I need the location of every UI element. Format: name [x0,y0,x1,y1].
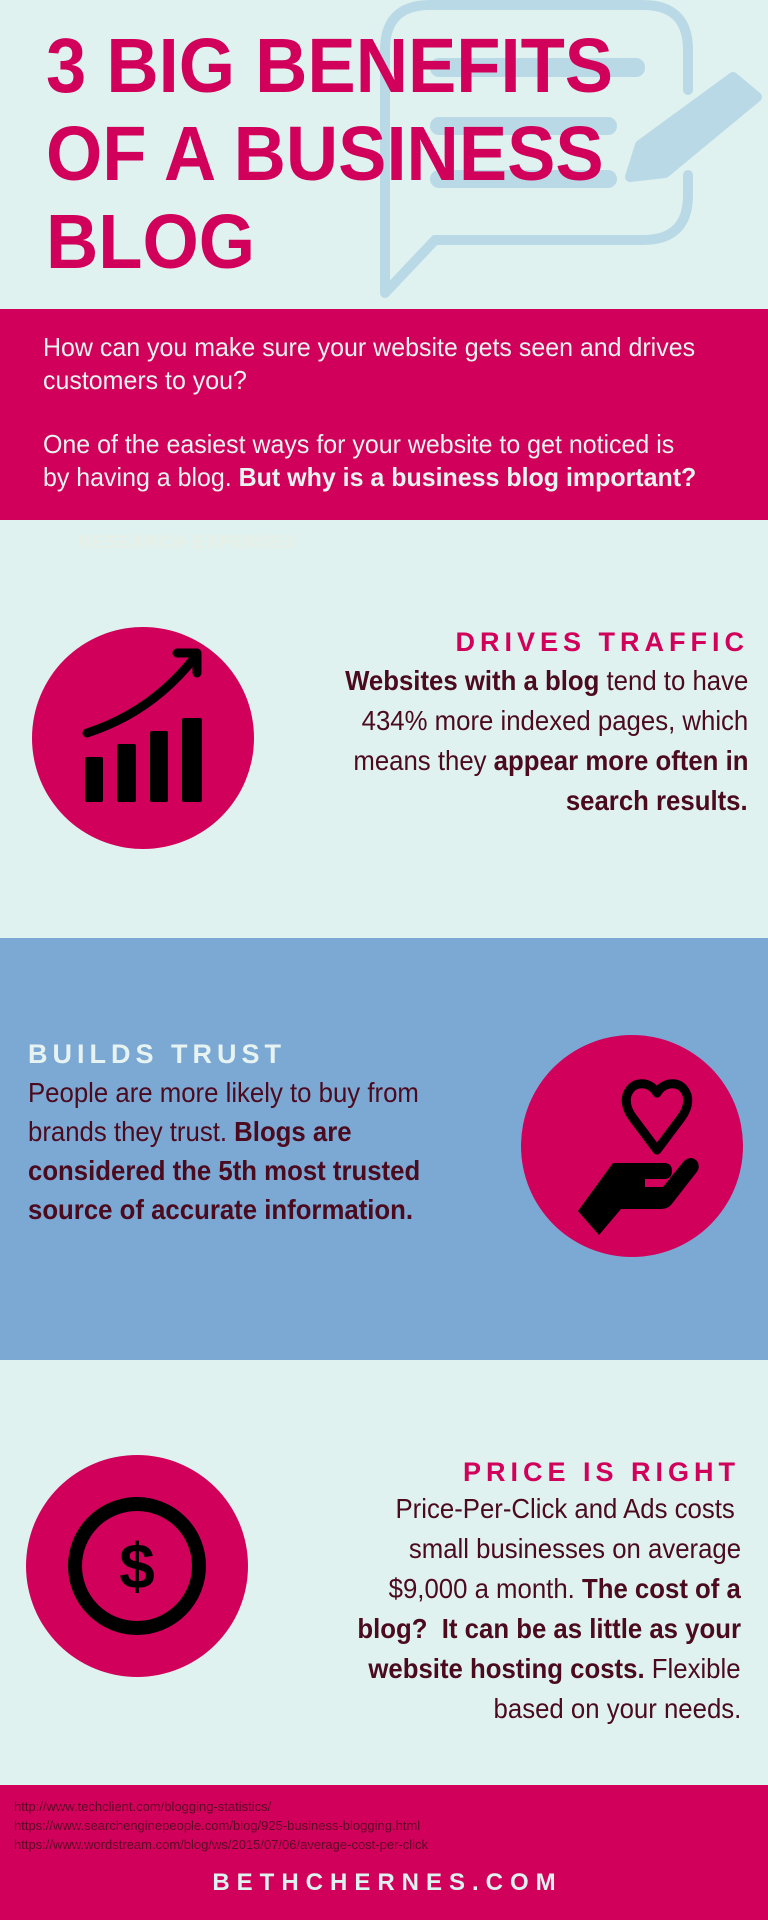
intro text: How can you make sure your website gets seen and drives [43,332,695,362]
icon: heart in hand circle [521,1035,743,1257]
body text: builds trust [28,1077,420,1225]
title [46,23,613,285]
panel: footer [0,1785,768,1920]
title: 3 BIG BENEFITS [46,23,613,109]
body text: drives traffic: Websites with a blog tend to have [345,665,748,696]
body text: price is right: $9,000 a month. The cost of a [389,1573,741,1604]
heading: price is right: PRICE IS RIGHT [463,1457,740,1487]
faint label: RESEARCH EXPENSES [78,532,298,552]
body text: price is right: blog? It can be as little as your [357,1613,741,1644]
body text: price is right [357,1493,741,1724]
icon: dollar coin circle [26,1455,248,1677]
panel: intro [0,309,768,520]
intro text [43,332,696,492]
sources: https://www.wordstream.com/blog/ws/2015/07/06/average-cost-per-click [14,1837,428,1852]
body text: price is right: Price-Per-Click and Ads costs [396,1493,735,1524]
body text: builds trust: People are more likely to buy from [28,1077,419,1108]
sources: https://www.searchenginepeople.com/blog/925-business-blogging.html [14,1818,420,1833]
panel: builds trust [0,938,768,1360]
icon: growth chart circle [32,627,254,849]
body text: builds trust: considered the 5th most trusted [28,1155,420,1186]
heading: drives traffic: DRIVES TRAFFIC [455,627,749,657]
footer brand: BETHCHERNES.COM [212,1869,563,1896]
body text: price is right: small businesses on average [409,1533,741,1564]
intro text: customers to you? [43,365,247,395]
panel: price is right [26,1455,741,1724]
intro text: One of the easiest ways for your website to get noticed is [43,429,674,459]
body text: drives traffic: search results. [566,785,748,816]
intro text: by having a blog. But why is a business blog important? [43,462,696,492]
body text: price is right: website hosting costs. Flexible [369,1653,741,1684]
body text: drives traffic [345,665,748,816]
body text: drives traffic: means they appear more often in [353,745,748,776]
icon: speech bubble with pencil [380,0,762,298]
sources: http://www.techclient.com/blogging-statistics/ [14,1799,271,1814]
sources [14,1799,428,1852]
body text: builds trust: brands they trust. Blogs are [28,1116,352,1147]
body text: price is right: based on your needs. [493,1693,741,1724]
title: BLOG [46,199,255,285]
body text: drives traffic: 434% more indexed pages, which [361,705,748,736]
heading: builds trust: BUILDS TRUST [28,1039,286,1069]
title: OF A BUSINESS [46,111,604,197]
icon: dollar coin circle: $ [119,1530,155,1602]
panel: drives traffic [32,627,749,849]
body text: builds trust: source of accurate information. [28,1194,413,1225]
